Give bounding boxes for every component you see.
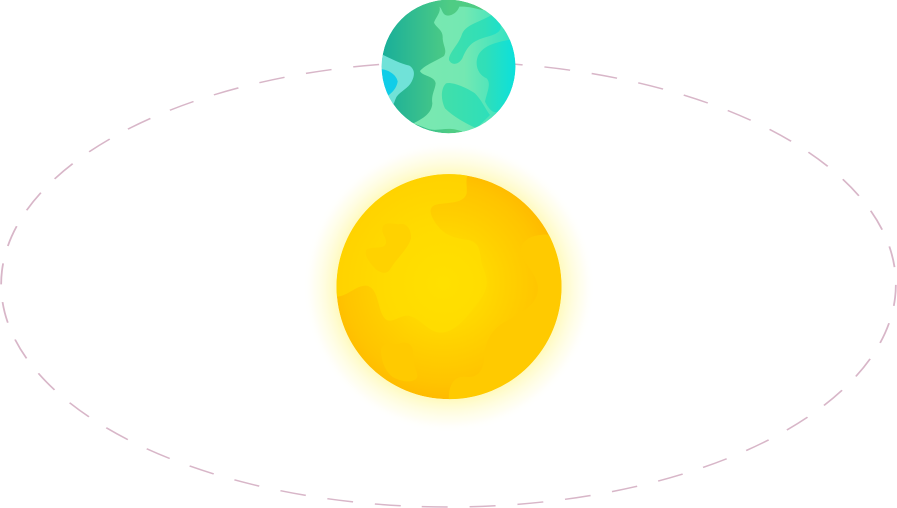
earth right sea bbox=[476, 40, 516, 112]
sun lower patch bbox=[386, 370, 410, 381]
earth lower sea bbox=[442, 83, 490, 128]
sun glow bbox=[303, 141, 595, 433]
sun bbox=[333, 170, 567, 403]
earth ice cap bbox=[382, 54, 414, 104]
sun base disc bbox=[336, 174, 561, 399]
sun central light region bbox=[336, 174, 468, 320]
earth dark land bbox=[382, 0, 515, 133]
earth upper sea bbox=[449, 12, 501, 64]
earth bbox=[378, 0, 520, 137]
sun upper-left patch bbox=[382, 231, 411, 272]
earth light land bbox=[413, 7, 517, 137]
earth ice inner bbox=[382, 69, 398, 96]
sun right patch bbox=[449, 235, 567, 403]
